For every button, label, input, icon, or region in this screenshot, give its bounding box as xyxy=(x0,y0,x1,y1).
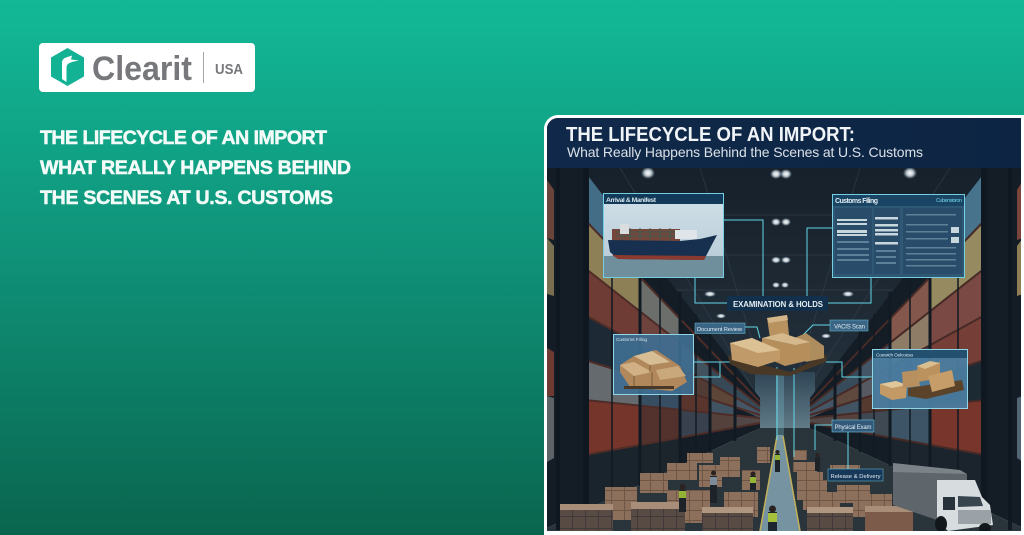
crates xyxy=(880,361,964,400)
panel: right crates xyxy=(872,350,968,408)
image title: THE LIFECYCLE OF AN IMPORT: xyxy=(566,124,855,146)
panel: arrival and manifest xyxy=(604,194,724,278)
panel status: Cubensioron xyxy=(936,198,962,204)
ceiling lights xyxy=(641,167,917,338)
workers xyxy=(679,450,820,531)
heading: WHAT REALLY HAPPENS BEHIND xyxy=(40,157,351,179)
label: physical exam: Physical Exam xyxy=(834,425,872,431)
label: document review: Document Review xyxy=(697,327,743,333)
panel title: Arrival & Manifest xyxy=(606,197,657,204)
image card frame xyxy=(544,115,1024,535)
crates xyxy=(620,350,687,391)
label: document review xyxy=(695,323,745,334)
floor pallets xyxy=(560,447,913,531)
left rack containers xyxy=(547,172,760,510)
right rack base xyxy=(810,214,1021,527)
label: physical exam xyxy=(832,420,874,432)
label: examination and holds xyxy=(727,296,828,311)
ceiling xyxy=(547,118,988,392)
wordmark suffix: USA xyxy=(215,62,243,78)
panel title: Coewich Oelcoesa xyxy=(876,352,913,358)
panel title: Customs Filing xyxy=(835,198,878,205)
aisle xyxy=(760,372,800,531)
label: VACIS scan xyxy=(830,320,868,331)
label: examination and holds: EXAMINATION & HOLDS xyxy=(733,300,823,309)
central pallet stack xyxy=(728,315,826,376)
label: release and delivery: Release & Delivery xyxy=(830,474,881,480)
icon: delivery truck xyxy=(893,463,993,533)
panel: left crates xyxy=(614,334,694,394)
heading: THE SCENES AT U.S. CUSTOMS xyxy=(40,187,333,209)
warehouse illustration xyxy=(547,118,1023,535)
label: VACIS scan: VACIS Scan xyxy=(834,324,865,330)
cargo ship xyxy=(608,224,717,260)
panel: customs filing xyxy=(832,194,964,278)
image subtitle: What Really Happens Behind the Scenes at U.S. Customs xyxy=(567,144,923,160)
heading: THE LIFECYCLE OF AN IMPORT xyxy=(40,127,327,149)
icon: teal hexagon xyxy=(51,48,84,86)
right rack containers xyxy=(810,130,1023,530)
floor xyxy=(547,428,1023,535)
header band xyxy=(547,118,1021,168)
connector lines xyxy=(693,220,872,469)
label: release and delivery xyxy=(828,469,883,481)
heading xyxy=(40,127,351,209)
far end wall xyxy=(755,372,815,434)
wordmark: Clearit xyxy=(92,50,192,88)
panel title: Customs Filing xyxy=(616,337,647,343)
form fields xyxy=(835,208,962,274)
left rack base xyxy=(547,120,760,528)
left rack beams and posts xyxy=(558,130,760,530)
logo: Clearit USA xyxy=(39,43,255,92)
